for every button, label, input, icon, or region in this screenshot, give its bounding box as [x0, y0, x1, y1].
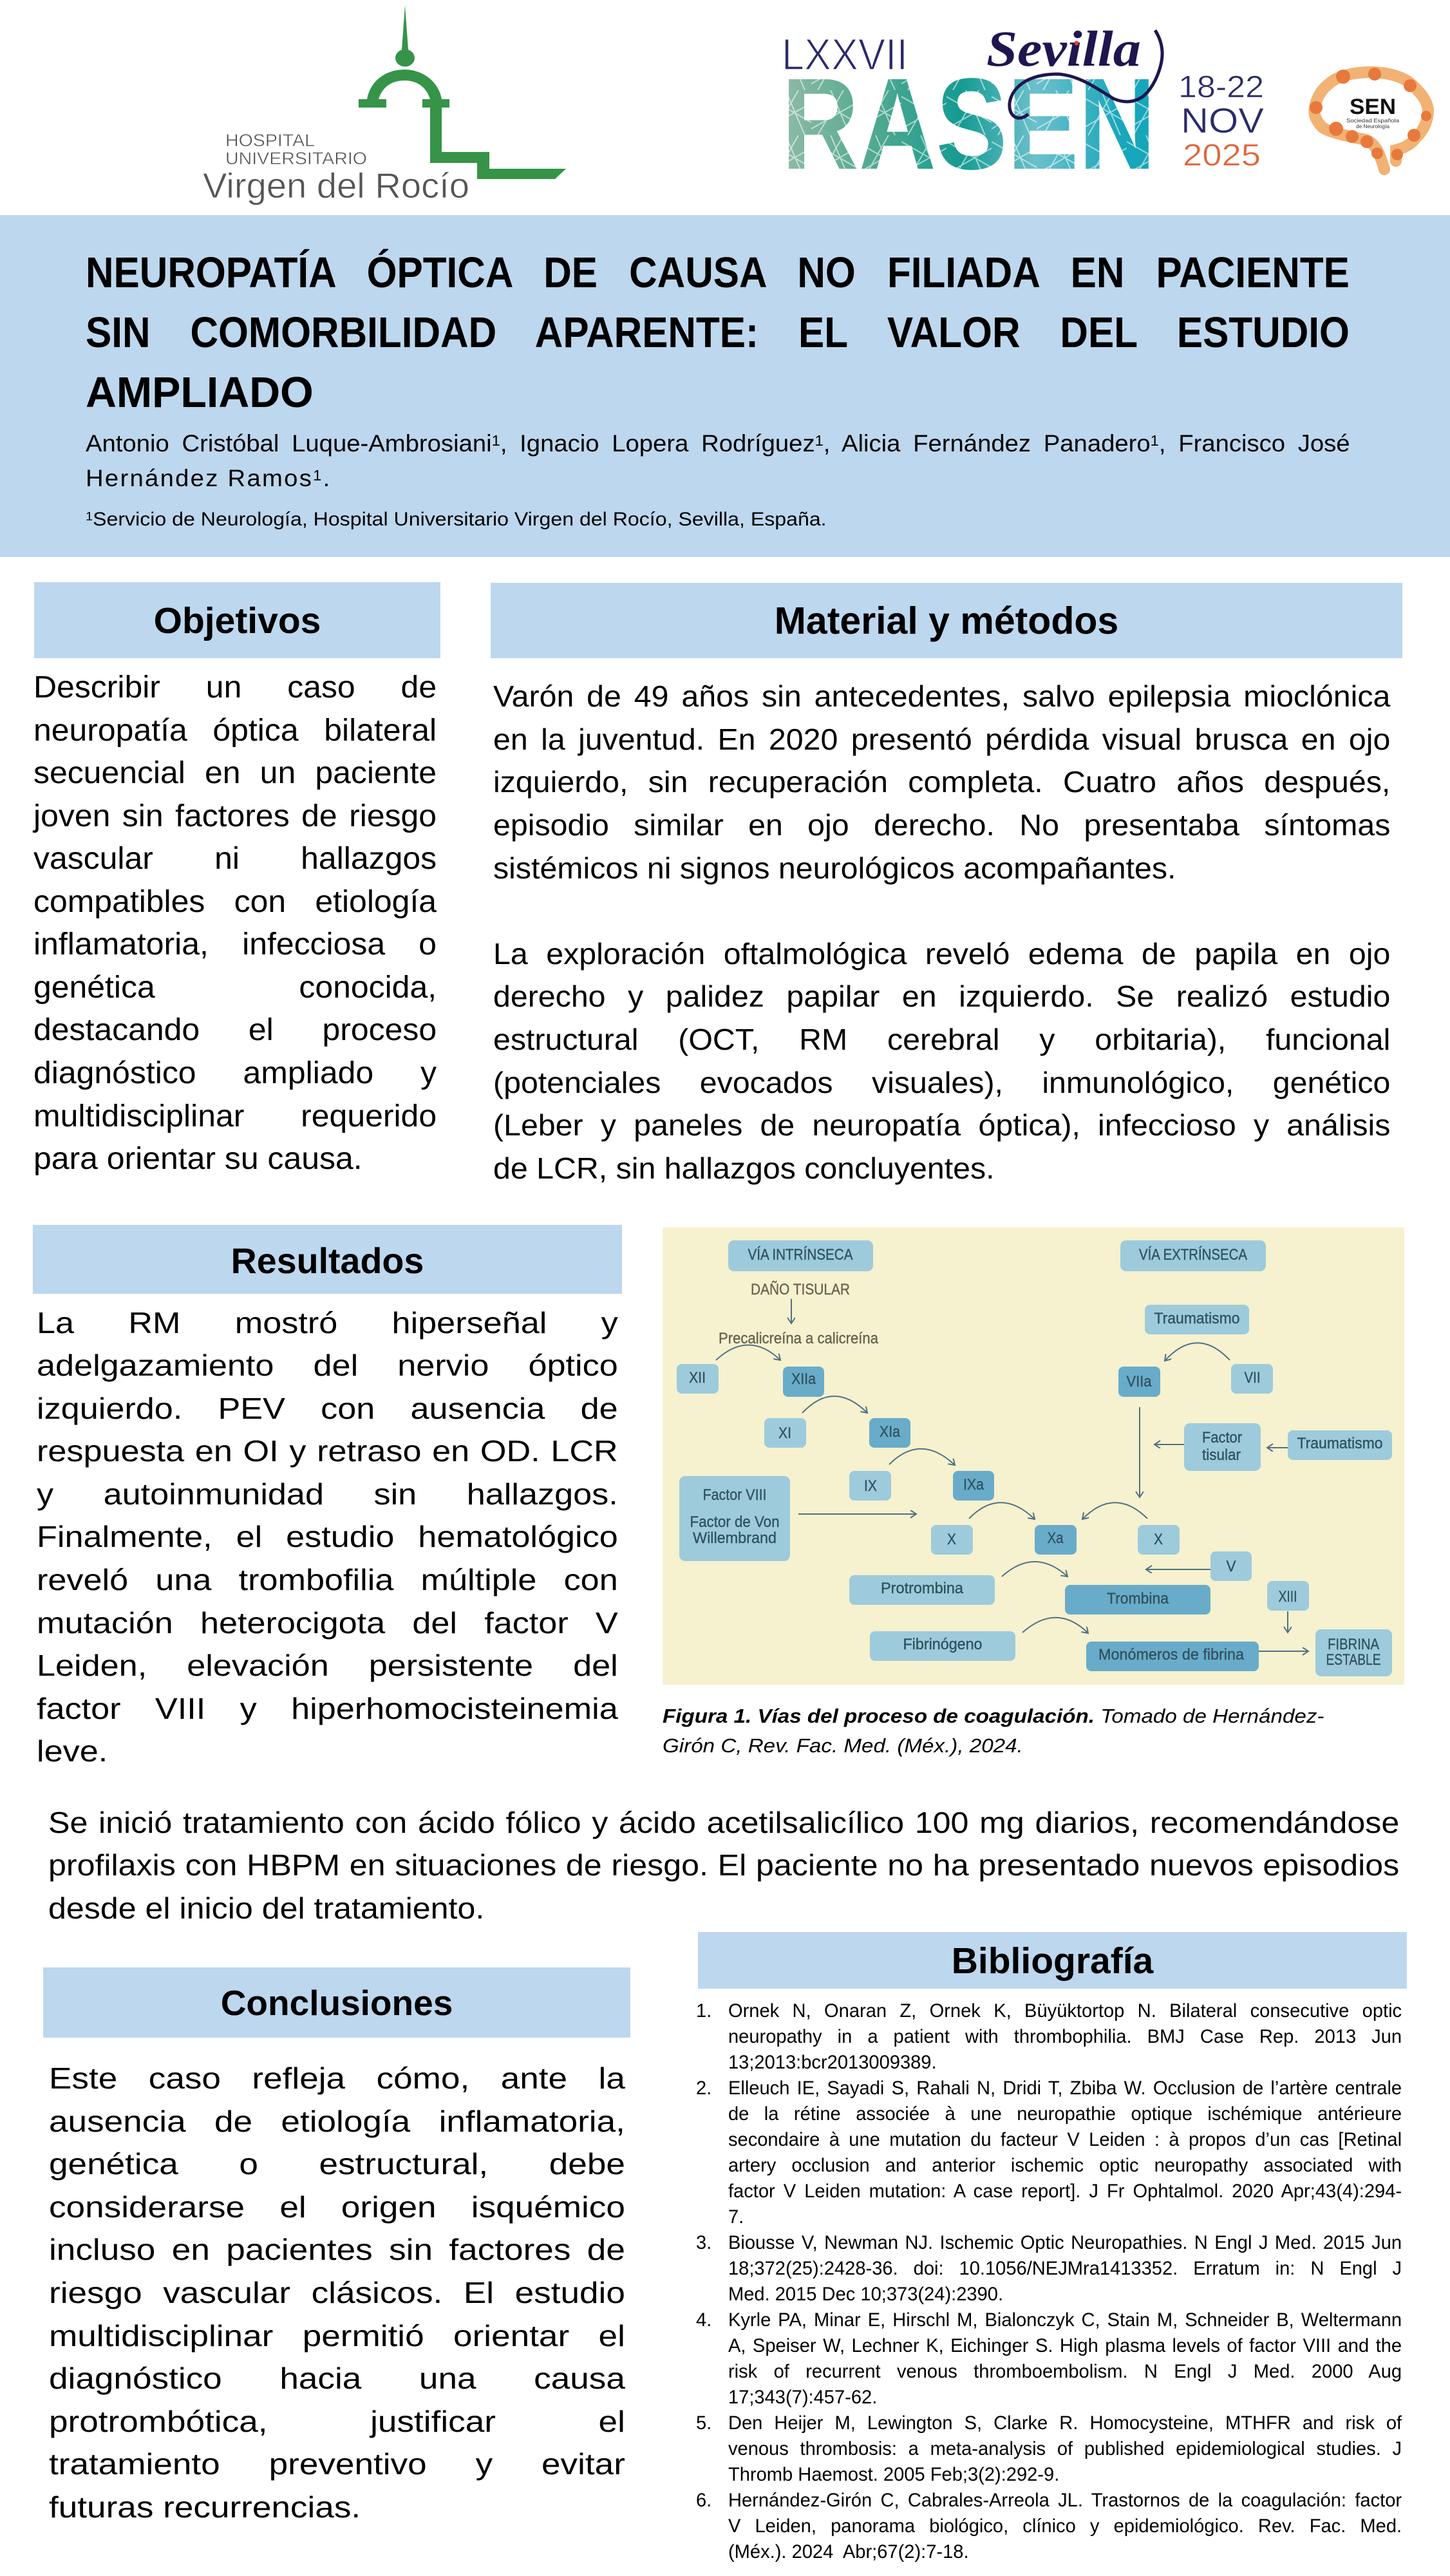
node: IXa — [953, 1471, 994, 1501]
reference list: 17;343(7):457-62. — [728, 2387, 877, 2408]
node: X left — [931, 1525, 973, 1555]
arrow: VII to VIIa — [1165, 1343, 1230, 1361]
logo: LXXVII RASEN Sevilla: RASEN — [782, 51, 1156, 196]
figure caption: Figura 1. Vías del proceso de coagulación. Tomado de Hernández- — [663, 1705, 1324, 1727]
node: vía extrínseca — [1120, 1240, 1266, 1271]
node: XII: XII — [689, 1369, 706, 1387]
text block: material y métodos: Varón de 49 años sin antecedentes, salvo epilepsia mioclónica — [493, 679, 1390, 713]
reference list: (Méx.). 2024 Abr;67(2):7-18. — [728, 2541, 969, 2562]
text block: objetivos: genética conocida, — [33, 971, 437, 1005]
arrow: VIIa to X — [1139, 1407, 1140, 1497]
text block: resultados: leve. — [37, 1734, 108, 1768]
text block: conclusiones: futuras recurrencias. — [49, 2490, 361, 2524]
logo: SEN brain: SEN — [1350, 95, 1396, 119]
reference list: venous thrombosis: a meta-analysis of published epidemiological studies. J — [728, 2438, 1402, 2459]
text block: tratamiento: Se inició tratamiento con ácido fólico y ácido acetilsalicílico 100 mg diarios, recomendándose — [48, 1806, 1399, 1839]
node: traumatismo right: Traumatismo — [1297, 1435, 1383, 1452]
panel: Objetivos — [32, 582, 440, 1176]
reference list: Elleuch IE, Sayadi S, Rahali N, Dridi T, Zbiba W. Occlusion de l’artère centrale — [728, 2078, 1402, 2099]
node: VII: VII — [1244, 1369, 1261, 1387]
node: XIa: XIa — [880, 1423, 901, 1441]
logo: Hospital Universitario Virgen del Rocío: UNIVERSITARIO — [225, 149, 367, 168]
node: V: V — [1226, 1558, 1236, 1575]
reference list: 18;372(25):2428-36. doi: 10.1056/NEJMra1413352. Erratum in: N Engl J — [728, 2258, 1402, 2279]
arrow: XII to XIIa — [716, 1345, 780, 1360]
node: vía extrínseca: VÍA EXTRÍNSECA — [1139, 1246, 1247, 1264]
text block: objetivos: vascular ni hallazgos — [33, 842, 437, 876]
node: VII — [1231, 1364, 1273, 1394]
affiliation: 1Servicio de Neurología, Hospital Universitario Virgen del Rocío, Sevilla, España. — [86, 509, 827, 530]
arrow: V to trombina — [1146, 1569, 1210, 1570]
text block: material y métodos: de LCR, sin hallazgos concluyentes. — [493, 1151, 995, 1185]
node: Xa — [1035, 1525, 1077, 1555]
heading: Bibliografía: Bibliografía — [952, 1940, 1153, 1982]
node: XIIa — [783, 1367, 824, 1397]
text block: material y métodos: derecho y palidez papilar en izquierdo. Se realizó estudio — [493, 980, 1390, 1013]
congress dates: 18-22 — [1178, 70, 1264, 104]
arrow: XIII to fibrina estable — [1287, 1611, 1288, 1633]
panel: Bibliografía — [696, 1932, 1407, 2562]
text block: resultados: Leiden, elevación persistente del — [37, 1649, 618, 1682]
node: fibrinógeno: Fibrinógeno — [903, 1636, 983, 1653]
reference list: 6. — [696, 2490, 711, 2511]
node: X left: X — [947, 1531, 956, 1548]
reference list: Med. 2015 Dec 10;373(24):2390. — [728, 2284, 1003, 2305]
heading: Conclusiones — [43, 1967, 630, 2038]
reference list: 1. — [696, 2000, 711, 2022]
heading: Resultados: Resultados — [231, 1241, 424, 1281]
reference list: 5. — [696, 2412, 711, 2434]
text block: material y métodos — [493, 679, 1391, 1185]
figure: coagulation pathways — [663, 1227, 1404, 1685]
node: vía intrínseca: VÍA INTRÍNSECA — [748, 1246, 852, 1264]
text block: conclusiones: genética o estructural, debe — [49, 2147, 625, 2181]
text block: material y métodos: estructural (OCT, RM cerebral y orbitaria), funcional — [493, 1023, 1390, 1056]
authors: Antonio Cristóbal Luque-Ambrosiani1, Ignacio Lopera Rodríguez1, Alicia Fernández Panadero1, Francisco José — [86, 430, 1350, 457]
text block: resultados: reveló una trombofilia múltiple con — [37, 1563, 618, 1596]
title: SIN COMORBILIDAD APARENTE: EL VALOR DEL ESTUDIO — [86, 308, 1350, 357]
node: traumatismo top: Traumatismo — [1154, 1310, 1240, 1327]
node: XII — [677, 1364, 719, 1394]
text block: objetivos: diagnóstico ampliado y — [33, 1056, 437, 1090]
text block: objetivos: para orientar su causa. — [33, 1142, 362, 1176]
node: vía intrínseca — [728, 1240, 873, 1271]
text block: material y métodos: en la juventud. En 2020 presentó pérdida visual brusca en ojo — [493, 723, 1390, 756]
reference list: Den Heijer M, Lewington S, Clarke R. Homocysteine, MTHFR and risk of — [728, 2412, 1402, 2434]
arrow: protrombina to trombina — [1002, 1562, 1068, 1577]
title: AMPLIADO — [86, 368, 314, 417]
reference list: Thromb Haemost. 2005 Feb;3(2):292-9. — [728, 2464, 1059, 2485]
node: XIII: XIII — [1279, 1588, 1297, 1605]
logo: Hospital Universitario Virgen del Rocío: Virgen del Rocío — [203, 166, 469, 205]
node: monómeros de fibrina: Monómeros de fibrina — [1098, 1646, 1245, 1663]
figure caption: Girón C, Rev. Fac. Med. (Méx.), 2024. — [663, 1734, 1023, 1757]
logo: SEN brain — [1310, 68, 1431, 169]
reference list: Kyrle PA, Minar E, Hirschl M, Bialonczyk C, Stain M, Schneider B, Weltermann — [728, 2309, 1402, 2331]
reference list: 7. — [728, 2206, 744, 2228]
arrow: XI to XIa — [802, 1396, 867, 1413]
heading: Objetivos: Objetivos — [154, 600, 321, 641]
authors: Hernández Ramos1. — [86, 465, 331, 491]
node: XIa — [869, 1418, 910, 1448]
text block: material y métodos: sistémicos ni signos neurológicos acompañantes. — [493, 851, 1176, 885]
congress dates — [1178, 70, 1264, 173]
label: precalicreína a calicreína: Precalicreína a calicreína — [719, 1330, 879, 1347]
arrow: X left to Xa — [969, 1502, 1035, 1519]
reference list: risk of recurrent venous thromboembolism. N Engl J Med. 2000 Aug — [728, 2361, 1402, 2382]
congress dates: NOV — [1181, 100, 1264, 140]
logo: SEN brain: de Neurología — [1356, 123, 1389, 129]
node: XI: XI — [778, 1425, 791, 1442]
title: NEUROPATÍA ÓPTICA DE CAUSA NO FILIADA EN PACIENTE — [86, 249, 1350, 297]
node: protrombina: Protrombina — [881, 1580, 964, 1597]
text block: resultados: La RM mostró hiperseñal y — [37, 1306, 618, 1340]
arrow: traumatismo to factor tisular — [1267, 1447, 1288, 1448]
text block: tratamiento — [48, 1806, 1399, 1925]
node: XIII — [1267, 1581, 1309, 1611]
node: Xa: Xa — [1047, 1530, 1064, 1547]
title band — [0, 215, 1450, 557]
node: V — [1210, 1551, 1252, 1581]
panel: Conclusiones — [43, 1967, 630, 2524]
node: X right — [1138, 1525, 1180, 1555]
reference list: 2. — [696, 2078, 711, 2099]
text block: conclusiones: riesgo vascular clásicos. El estudio — [49, 2276, 625, 2309]
node: fibrina estable — [1315, 1629, 1392, 1676]
text block: objetivos: destacando el proceso — [33, 1013, 437, 1047]
node: VIIa: VIIa — [1127, 1373, 1152, 1390]
text block: resultados: mutación heterocigota del factor V — [37, 1606, 618, 1640]
arrow: monómeros to fibrina estable — [1259, 1651, 1308, 1652]
reference list: 4. — [696, 2309, 711, 2331]
text block: objetivos: compatibles con etiología — [33, 885, 437, 919]
node: protrombina — [849, 1575, 995, 1605]
text block: conclusiones: diagnóstico hacia una causa — [49, 2362, 625, 2395]
reference list — [696, 2000, 1402, 2562]
text block: material y métodos: episodio similar en ojo derecho. No presentaba síntomas — [493, 808, 1390, 842]
panel: Material y métodos — [491, 583, 1402, 1185]
reference list: factor V Leiden mutation: A case report]. J Fr Ophtalmol. 2020 Apr;43(4):294- — [728, 2181, 1402, 2202]
logo: LXXVII RASEN Sevilla: LXXVII — [782, 30, 908, 79]
text block: resultados: y autoinmunidad sin hallazgos. — [37, 1477, 618, 1511]
node: traumatismo top — [1145, 1305, 1249, 1334]
reference list: Biousse V, Newman NJ. Ischemic Optic Neuropathies. N Engl J Med. 2015 Jun — [728, 2232, 1402, 2253]
node: factor VIII and von Willebrand: Factor de Von — [690, 1513, 779, 1531]
heading: Objetivos — [34, 582, 440, 658]
text block: conclusiones: considerarse el origen isquémico — [49, 2190, 625, 2224]
node: fibrinógeno — [870, 1631, 1015, 1661]
text block: conclusiones: incluso en pacientes sin factores de — [49, 2233, 625, 2266]
reference list: 13;2013:bcr2013009389. — [728, 2052, 937, 2073]
reference list: secondaire à une mutation du facteur V Leiden : à propos d’un cas [Retinal — [728, 2129, 1402, 2150]
title — [86, 249, 1350, 417]
text block: objetivos: joven sin factores de riesgo — [33, 799, 437, 833]
reference list: neuropathy in a patient with thrombophilia. BMJ Case Rep. 2013 Jun — [728, 2026, 1402, 2047]
node: factor tisular: tisular — [1202, 1446, 1241, 1464]
logo: Hospital Universitario Virgen del Rocío — [203, 5, 566, 205]
congress dates: 2025 — [1183, 138, 1261, 173]
reference list: artery occlusion and anterior ischemic optic neuropathy associated with — [728, 2155, 1402, 2176]
reference list: V Leiden, panorama biológico, clínico y epidemiológico. Rev. Fac. Med. — [728, 2515, 1402, 2537]
logo: SEN brain: Sociedad Española — [1346, 117, 1399, 124]
node: monómeros de fibrina — [1086, 1642, 1259, 1671]
reference list: A, Speiser W, Lechner K, Eichinger S. High plasma levels of factor VIII and the — [728, 2335, 1402, 2356]
node: factor tisular — [1184, 1423, 1261, 1471]
node: IX — [849, 1471, 891, 1501]
heading: Bibliografía — [698, 1932, 1407, 1989]
text block: conclusiones: protrombótica, justificar el — [49, 2405, 625, 2438]
arrow: IX to IXa — [889, 1449, 955, 1465]
text block: material y métodos: La exploración oftalmológica reveló edema de papila en ojo — [493, 937, 1390, 971]
node: XIIa: XIIa — [791, 1370, 816, 1388]
node: factor tisular: Factor — [1202, 1429, 1242, 1446]
text block: objetivos: neuropatía óptica bilateral — [33, 714, 437, 748]
text block: conclusiones: Este caso refleja cómo, ante la — [49, 2061, 625, 2095]
logo: LXXVII RASEN Sevilla: Sevilla — [986, 21, 1141, 77]
node: fibrina estable: ESTABLE — [1326, 1651, 1380, 1669]
text block: resultados — [37, 1306, 618, 1768]
text block: material y métodos: (Leber y paneles de neuropatía óptica), infeccioso y análisis — [493, 1108, 1390, 1142]
text block: material y métodos: (potenciales evocados visuales), inmunológico, genético — [493, 1066, 1390, 1099]
label: daño tisular: DAÑO TISULAR — [751, 1281, 850, 1298]
text block: tratamiento: profilaxis con HBPM en situaciones de riesgo. El paciente no ha presentado nuevos episodios — [48, 1848, 1399, 1882]
text block: objetivos: secuencial en un paciente — [33, 756, 437, 790]
heading: Material y métodos — [491, 583, 1402, 658]
node: X right: X — [1154, 1531, 1163, 1548]
text block: resultados: Finalmente, el estudio hematológico — [37, 1520, 618, 1553]
text block: resultados: izquierdo. PEV con ausencia de — [37, 1392, 618, 1425]
reference list: 3. — [696, 2232, 711, 2253]
arrow: factor tisular to pathway — [1154, 1444, 1184, 1445]
figure caption — [663, 1705, 1324, 1757]
text block: objetivos: Describir un caso de — [33, 670, 437, 705]
node: trombina: Trombina — [1107, 1590, 1169, 1607]
node: IX: IX — [864, 1477, 877, 1495]
arrow: X right to Xa — [1082, 1502, 1147, 1519]
node: trombina — [1065, 1585, 1210, 1615]
text block: resultados: respuesta en OI y retraso en OD. LCR — [37, 1434, 618, 1468]
node: factor VIII and von Willebrand: Willembrand — [693, 1530, 777, 1547]
text block: conclusiones: ausencia de etiología inflamatoria, — [49, 2105, 625, 2138]
node: factor VIII and von Willebrand — [679, 1476, 790, 1561]
authors — [86, 430, 1350, 491]
node: traumatismo right — [1288, 1430, 1392, 1460]
node: fibrina estable: FIBRINA — [1328, 1636, 1379, 1653]
reference list: Ornek N, Onaran Z, Ornek K, Büyüktortop N. Bilateral consecutive optic — [728, 2000, 1402, 2022]
node: VIIa — [1118, 1367, 1160, 1397]
heading: Material y métodos: Material y métodos — [775, 600, 1118, 642]
text block: objetivos: inflamatoria, infecciosa o — [33, 927, 437, 961]
reference list: Hernández-Girón C, Cabrales-Arreola JL. Trastornos de la coagulación: factor — [728, 2490, 1402, 2511]
node: IXa: IXa — [963, 1476, 984, 1493]
text block: conclusiones: multidisciplinar permitió orientar el — [49, 2319, 625, 2353]
text block: tratamiento: desde el inicio del tratamiento. — [48, 1891, 484, 1925]
text block: objetivos — [32, 670, 437, 1176]
arrow: fibrinógeno to monómeros — [1022, 1618, 1088, 1633]
text block: conclusiones — [49, 2061, 625, 2524]
node: XI — [764, 1418, 806, 1448]
text block: objetivos: multidisciplinar requerido — [33, 1099, 437, 1133]
arrow: daño tisular to precalicreína — [791, 1299, 792, 1323]
panel: Resultados — [33, 1225, 622, 1768]
node: factor VIII and von Willebrand: Factor VIII — [703, 1486, 766, 1504]
logo: Hospital Universitario Virgen del Rocío: HOSPITAL — [225, 131, 315, 150]
reference list: de la rétine associée à une neuropathie optique ischémique antérieure — [728, 2103, 1402, 2125]
heading: Conclusiones: Conclusiones — [221, 1983, 453, 2023]
heading: Resultados — [33, 1225, 622, 1294]
header logos — [203, 5, 1434, 205]
text block: material y métodos: izquierdo, sin recuperación completa. Cuatro años después, — [493, 765, 1390, 799]
arrow: factor VIII to X — [798, 1513, 916, 1515]
text block: resultados: factor VIII y hiperhomocisteinemia — [37, 1692, 618, 1725]
text block: conclusiones: tratamiento preventivo y evitar — [49, 2447, 625, 2481]
text block: resultados: adelgazamiento del nervio óptico — [37, 1349, 618, 1382]
